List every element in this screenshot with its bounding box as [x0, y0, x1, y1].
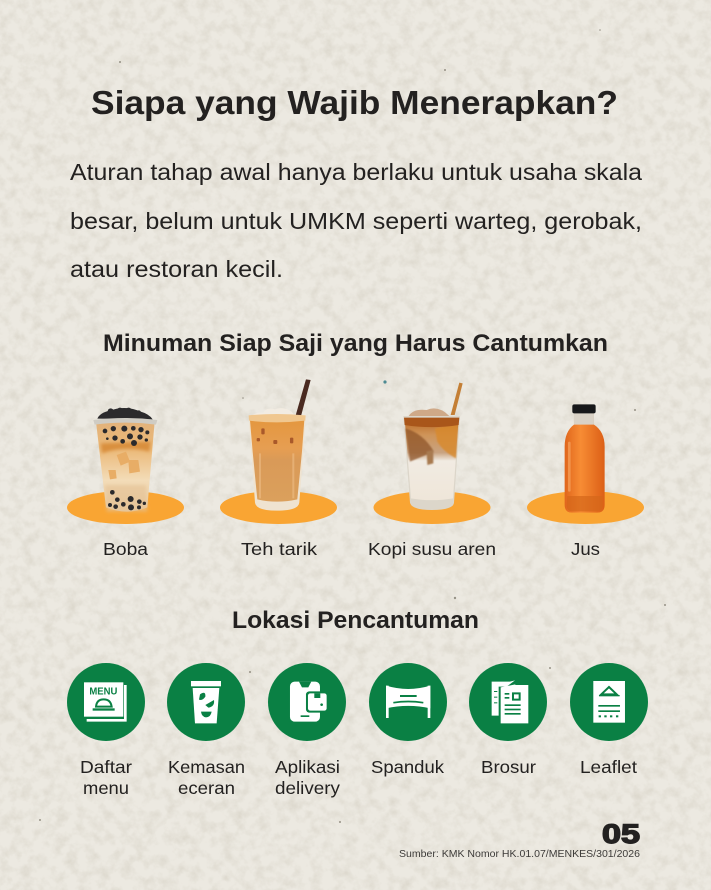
heading: drinks: Minuman Siap Saji yang Harus Cantumkan [103, 330, 608, 357]
location labels: eceran [178, 778, 235, 798]
drink labels [103, 539, 600, 559]
drink labels: Kopi susu aren [368, 539, 496, 559]
icon: leaflet [570, 663, 648, 741]
page number: 05 [602, 819, 640, 849]
intro paragraph: besar, belum untuk UMKM seperti warteg, gerobak, [70, 208, 642, 234]
icon: menu: MENU [89, 687, 117, 698]
heading: location: Lokasi Pencantuman [232, 607, 479, 634]
location labels: Aplikasi [275, 757, 340, 777]
icon: retail packaging [167, 663, 245, 741]
drink: teh tarik [220, 379, 337, 524]
icon: brochure [469, 663, 547, 741]
drink: jus [527, 404, 644, 524]
icon: banner [369, 663, 447, 741]
source: Sumber: KMK Nomor HK.01.07/MENKES/301/2026 [399, 848, 640, 860]
location labels: Brosur [481, 757, 536, 777]
location labels: Leaflet [580, 757, 637, 777]
drink: boba [67, 408, 184, 524]
title: Siapa yang Wajib Menerapkan? [91, 84, 618, 121]
intro paragraph [70, 159, 643, 282]
drink: kopi susu aren [374, 383, 490, 524]
drink labels: Jus [571, 539, 600, 559]
location labels: menu [83, 778, 129, 798]
location labels: Daftar [80, 757, 132, 777]
location labels: Spanduk [371, 757, 444, 777]
drink labels: Teh tarik [241, 539, 317, 559]
icon: menu [67, 663, 145, 741]
location labels [80, 757, 637, 798]
icon: delivery app [268, 663, 346, 741]
drink labels: Boba [103, 539, 148, 559]
intro paragraph: atau restoran kecil. [70, 256, 283, 282]
intro paragraph: Aturan tahap awal hanya berlaku untuk usaha skala [70, 159, 643, 185]
location labels: delivery [275, 778, 340, 798]
location labels: Kemasan [168, 757, 245, 777]
